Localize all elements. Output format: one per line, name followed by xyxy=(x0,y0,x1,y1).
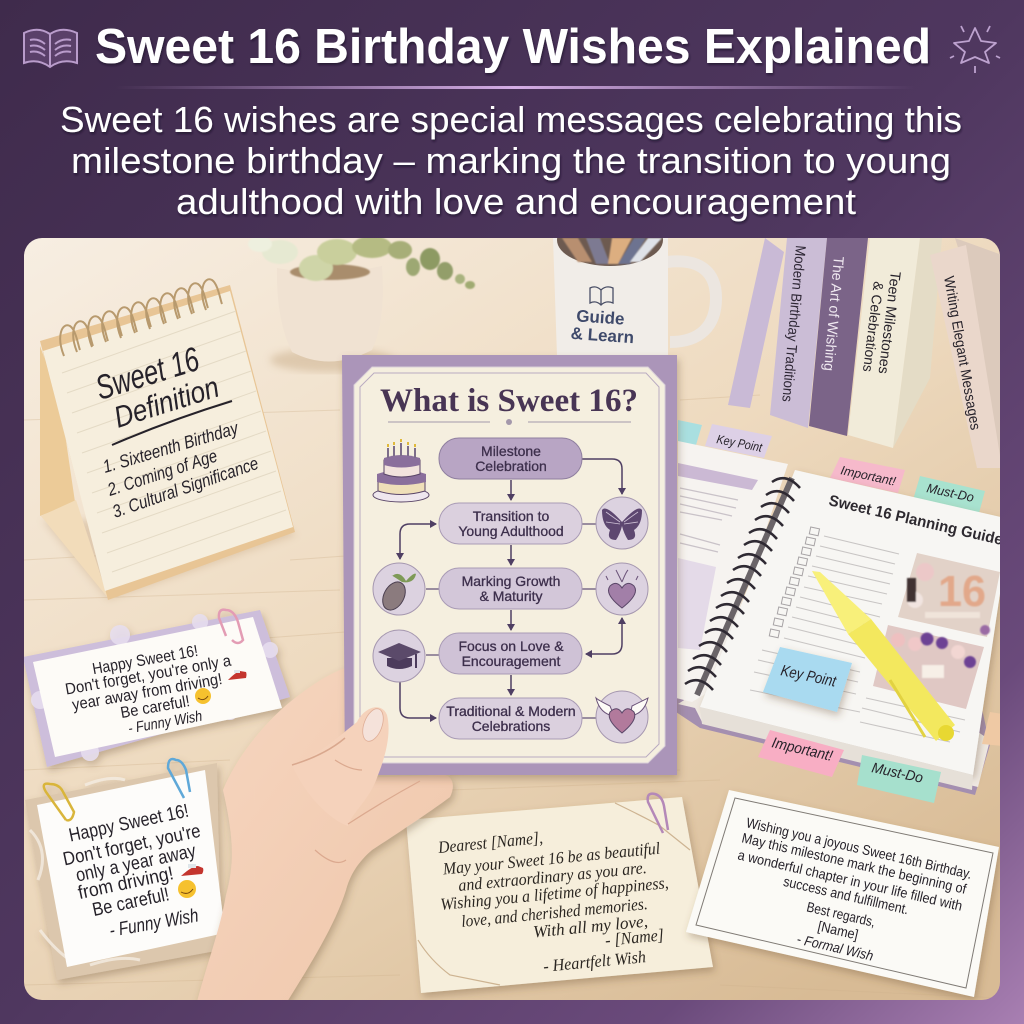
wish text: - [Name] xyxy=(604,925,665,950)
pill: transition: Young Adulthood xyxy=(458,523,564,539)
wish text: and extraordinary as you are. xyxy=(457,858,647,895)
wish text: a wonderful chapter in your life filled with xyxy=(736,846,964,914)
photo: balloons 16: 16 xyxy=(938,567,986,616)
right page xyxy=(700,470,1005,775)
note: funny wish bottom xyxy=(25,759,225,980)
wish text: Be careful! xyxy=(91,884,171,921)
icon: winged heart xyxy=(596,691,648,743)
top tabs: Key Point xyxy=(715,432,764,455)
pill: growth xyxy=(439,568,582,609)
pill: milestone: Milestone xyxy=(481,443,541,459)
wish text: May this milestone mark the beginning of xyxy=(740,829,968,897)
icon: heart with flowers xyxy=(596,563,648,615)
calendar text xyxy=(98,347,258,518)
book: The Art of Wishing xyxy=(809,238,868,436)
note: funny wish top xyxy=(23,610,290,767)
book: Modern Birthday Traditions xyxy=(770,238,827,428)
icon: cake xyxy=(373,439,429,502)
left page xyxy=(676,441,788,702)
wish text xyxy=(436,828,669,976)
books xyxy=(728,238,1002,468)
pill: celebrations: Celebrations xyxy=(472,718,550,734)
calendar text: Definition xyxy=(110,371,223,435)
note: formal wish xyxy=(686,790,999,997)
card: what is sweet 16 xyxy=(342,355,677,775)
book: Teen Milestones: & Celebrations xyxy=(860,281,887,373)
mug label: Guide xyxy=(576,306,625,329)
calendar text: 3. Cultural Significance xyxy=(110,453,261,522)
connectors xyxy=(400,459,622,718)
notebook cover xyxy=(676,690,990,795)
bottom tab: important xyxy=(758,730,844,777)
wish text xyxy=(61,801,203,942)
calendar rings xyxy=(60,279,222,356)
pill: milestone: Celebration xyxy=(475,458,547,474)
top tabs xyxy=(678,420,985,513)
emoji: car xyxy=(181,864,203,876)
pill: love xyxy=(439,633,582,674)
wish text: only a year away xyxy=(74,841,198,887)
wish text xyxy=(64,643,233,737)
spiral binding xyxy=(685,478,800,695)
wish text: Dearest [Name], xyxy=(436,828,544,857)
wish text: Don't forget, you're xyxy=(61,821,203,870)
wish text: - Funny Wish xyxy=(108,905,200,942)
note: heartfelt wish xyxy=(406,794,713,993)
book: The Art of Wishing: The Art of Wishing xyxy=(820,256,846,372)
gold clip xyxy=(44,784,74,820)
wish text: Wishing you a joyous Sweet 16th Birthday. xyxy=(745,814,973,882)
card title: What is Sweet 16? xyxy=(380,383,638,419)
photo: balloons party xyxy=(873,625,984,709)
wish text: - Funny Wish xyxy=(127,708,204,737)
pill: love: Focus on Love & xyxy=(458,638,564,654)
pill: celebrations xyxy=(439,698,582,739)
mug label: & Learn xyxy=(570,324,635,347)
wish text: love, and cherished memories. xyxy=(460,894,648,931)
header xyxy=(24,20,1000,222)
title: Sweet 16 Birthday Wishes Explained xyxy=(95,20,931,74)
subtitle xyxy=(60,99,962,222)
bottom tab: must-do: Must-Do xyxy=(870,760,924,787)
checklist xyxy=(750,527,965,742)
wish text: - Heartfelt Wish xyxy=(542,947,647,976)
pill: transition xyxy=(439,503,582,544)
plant in pot xyxy=(248,236,475,372)
subtitle: Sweet 16 wishes are special messages celebrating this xyxy=(60,99,962,140)
wish text: With all my love, xyxy=(532,912,649,941)
wish text: Wishing you a lifetime of happiness, xyxy=(440,873,669,914)
spiral notebook xyxy=(676,420,1005,803)
book: Teen Milestones: Teen Milestones xyxy=(874,271,903,375)
wish text: Be careful! xyxy=(119,693,191,722)
subtitle: milestone birthday – marking the transition to young xyxy=(71,140,951,181)
icon: open book xyxy=(24,30,77,67)
wish text: May your Sweet 16 be as beautiful xyxy=(441,839,661,879)
mug label xyxy=(570,287,635,347)
book: Teen Milestones xyxy=(848,238,942,448)
pill: love: Encouragement xyxy=(462,653,561,669)
wooden desk xyxy=(24,238,1000,1000)
pill: celebrations: Traditional & Modern xyxy=(446,703,576,719)
sticky note: key point xyxy=(763,647,852,712)
wish text: Don't forget, you're only a xyxy=(64,653,233,699)
clip xyxy=(219,610,243,643)
mug with pens xyxy=(553,238,722,355)
sticky note: key point: Key Point xyxy=(779,662,838,691)
icon: graduation cap xyxy=(373,630,425,682)
wish text: success and fulfillment. xyxy=(782,873,910,917)
wish text: Happy Sweet 16! xyxy=(91,643,199,678)
wish text xyxy=(736,814,973,964)
panel: desk scene xyxy=(23,214,1005,1002)
photo: balloons 16 xyxy=(898,553,1000,637)
header rule xyxy=(115,86,915,89)
emoji: car xyxy=(228,670,246,680)
clip xyxy=(648,794,668,833)
guide heading: Sweet 16 Planning Guide xyxy=(827,492,1005,549)
hand xyxy=(197,668,453,1002)
icon: sprout xyxy=(373,563,425,615)
bottom tab: must-do xyxy=(857,755,941,803)
pill: growth: Marking Growth xyxy=(462,573,560,589)
thumb xyxy=(292,706,420,862)
emoji: wink xyxy=(178,880,196,898)
book: Modern Birthday Traditions: Modern Birthday Traditions xyxy=(778,245,808,402)
pill: transition: Transition to xyxy=(473,508,549,524)
icon: star xyxy=(950,26,1000,73)
wish text: year away from driving! xyxy=(71,671,224,714)
calendar text: 2. Coming of Age xyxy=(104,446,220,500)
yellow pen xyxy=(812,571,955,741)
wish text: Best regards, xyxy=(805,898,877,930)
book: Writing Elegant Messages: Writing Elegant Messages xyxy=(940,275,983,431)
top tabs: Important! xyxy=(839,463,898,489)
icon: butterfly xyxy=(596,497,648,549)
calendar text: 1. Sixteenth Birthday xyxy=(100,418,241,477)
subtitle: adulthood with love and encouragement xyxy=(176,181,856,222)
book: Writing Elegant Messages xyxy=(938,238,1000,468)
pill: milestone xyxy=(439,438,582,479)
right peach tab xyxy=(982,712,1002,746)
wish text: [Name] xyxy=(816,918,860,943)
wish text: Happy Sweet 16! xyxy=(67,801,191,847)
top tabs: Must-Do xyxy=(925,480,975,505)
bottom tab: important: Important! xyxy=(770,734,835,765)
wish text: from driving! xyxy=(76,863,175,904)
pill: growth: & Maturity xyxy=(479,588,543,604)
emoji: wink xyxy=(195,688,211,704)
blue clip xyxy=(168,759,190,798)
desk calendar xyxy=(40,279,296,600)
calendar text: Sweet 16 xyxy=(91,340,204,408)
wish text: - Formal Wish xyxy=(795,931,875,964)
book: lavender xyxy=(728,238,784,408)
